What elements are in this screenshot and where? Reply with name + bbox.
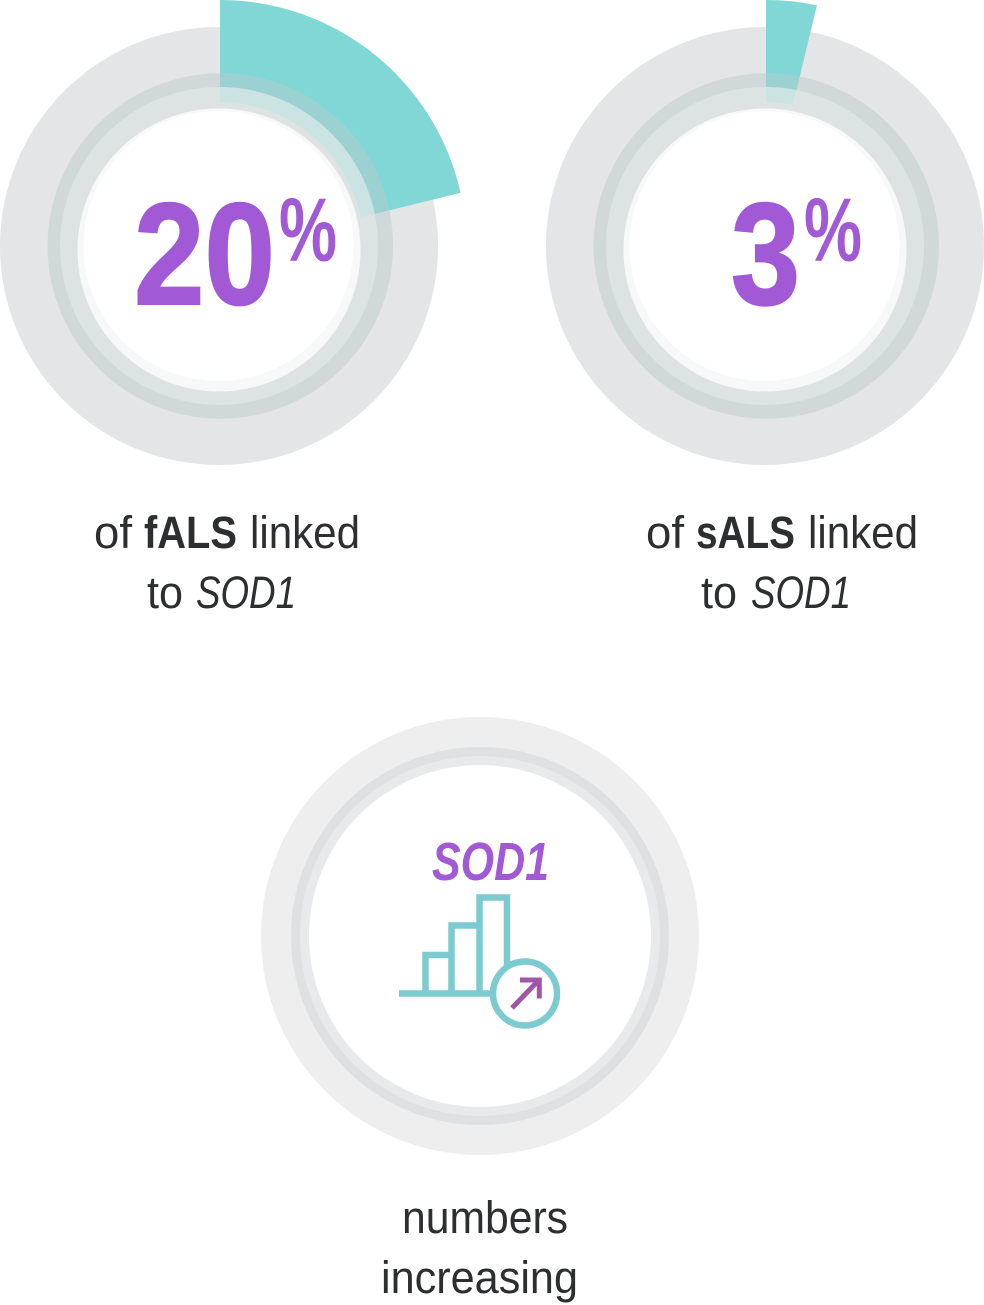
caption: fALS: of: [94, 507, 133, 558]
teal 20 percent wedge: [220, 0, 460, 210]
caption: fALS: fALS: [144, 507, 237, 558]
caption: numbers increasing: increasing: [381, 1252, 578, 1303]
off-white disc: [624, 108, 906, 392]
percent sign: %: [279, 181, 337, 281]
caption: sALS: of: [646, 507, 685, 558]
caption: fALS: [94, 507, 360, 618]
pale ring cover: [76, 102, 364, 390]
caption: fALS: to: [147, 567, 183, 618]
dark inner ring: [594, 73, 939, 419]
dark ring: [291, 747, 669, 1125]
dark inner ring: [48, 73, 393, 419]
light ring: [300, 756, 660, 1116]
caption: numbers increasing: [381, 1192, 578, 1303]
white centre disc: [630, 111, 900, 381]
panel: fALS 20 percent: [0, 0, 466, 493]
pale inner ring: [60, 87, 378, 405]
caption: sALS: sALS: [696, 507, 795, 558]
caption: sALS: linked: [808, 507, 918, 558]
panel: SOD1 numbers increasing: [261, 717, 699, 1155]
off-white disc: [78, 108, 360, 392]
teal 3 percent wedge: [766, 0, 817, 76]
caption: sALS: SOD1: [751, 567, 851, 618]
pale inner ring: [606, 87, 924, 405]
outer disc: [261, 717, 699, 1155]
caption: sALS: to: [701, 567, 737, 618]
value 3: 3: [731, 173, 800, 335]
white centre disc: [84, 111, 354, 381]
caption: sALS: [646, 507, 918, 618]
wedge over pale ring: [766, 87, 796, 105]
pale ring cover: [622, 102, 910, 390]
caption: numbers increasing: numbers: [402, 1192, 568, 1243]
caption: fALS: linked: [250, 507, 360, 558]
wedge over pale ring: [220, 87, 374, 218]
outer grey disc: [0, 27, 438, 465]
caption: fALS: SOD1: [196, 567, 296, 618]
icon: rising bars with arrow: [399, 898, 557, 1026]
panel: sALS 3 percent: [546, 0, 984, 465]
SOD1 heading: SOD1: [432, 832, 549, 892]
white centre: [309, 765, 651, 1107]
wedge over dark ring: [766, 74, 800, 90]
outer grey disc: [546, 27, 984, 465]
percent sign: %: [804, 181, 862, 281]
value 20: 20: [134, 173, 275, 335]
wedge over dark ring: [220, 74, 389, 214]
